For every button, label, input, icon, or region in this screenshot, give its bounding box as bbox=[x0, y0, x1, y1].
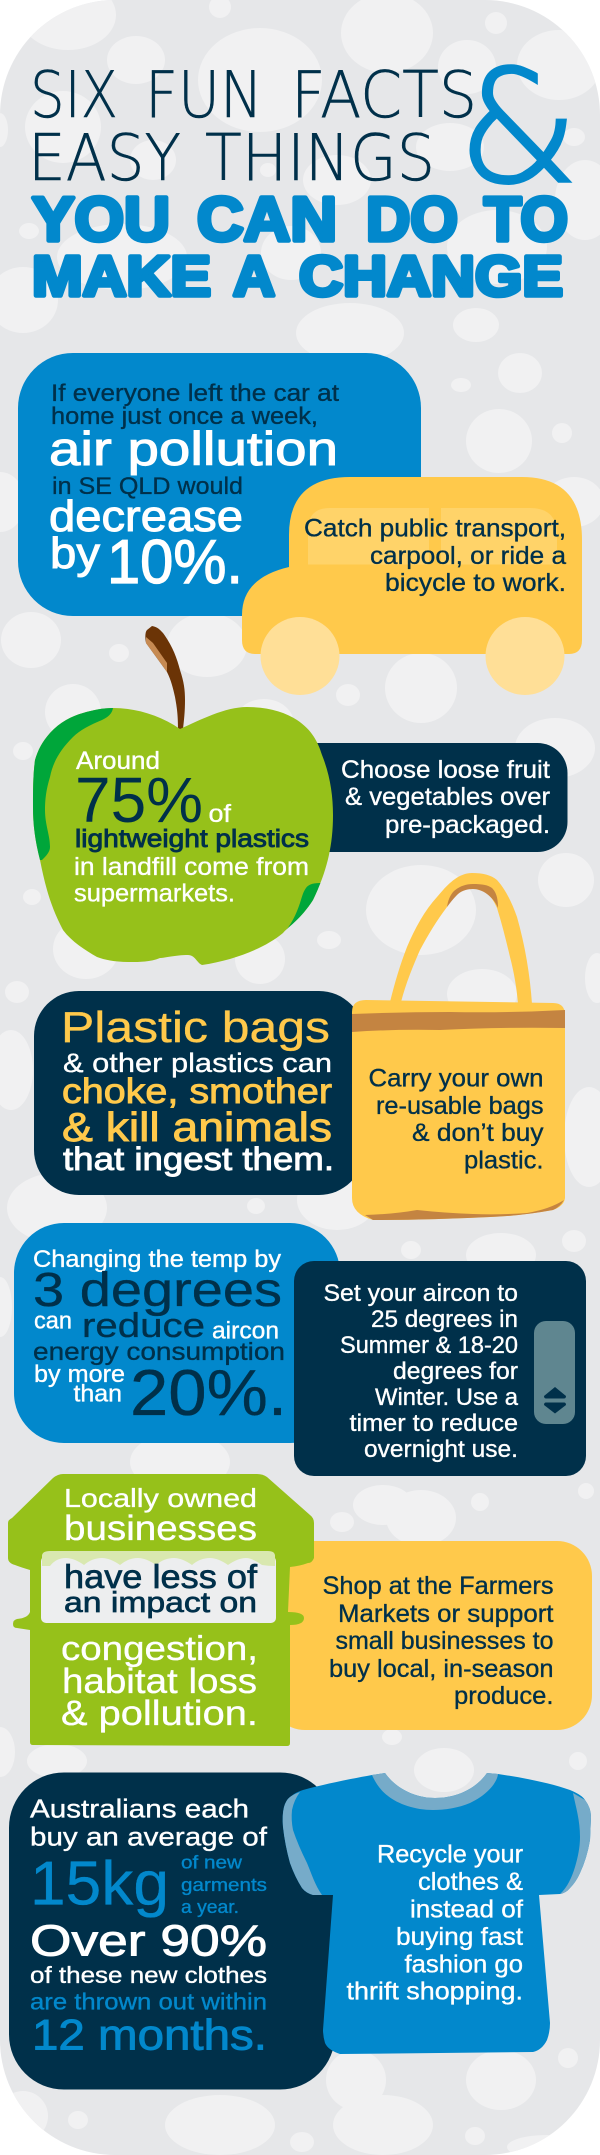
panel: farmers market tip: buy local, in-season bbox=[329, 1655, 554, 1683]
panel: aircon fact: Changing the temp by bbox=[33, 1246, 281, 1273]
panel: tote bag tip bbox=[352, 873, 565, 1220]
panel: aircon fact: can bbox=[34, 1308, 72, 1334]
panel: aircon fact: energy consumption bbox=[33, 1338, 285, 1366]
panel: local shop fact: congestion, bbox=[61, 1630, 258, 1668]
panel: local shop fact: Locally owned bbox=[64, 1483, 257, 1513]
title: CHANGE bbox=[299, 245, 563, 309]
title: FACTS bbox=[291, 59, 477, 133]
panel: aircon fact: reduce bbox=[82, 1307, 205, 1345]
panel: tote bag tip: re-usable bags bbox=[376, 1092, 544, 1120]
panel: t-shirt tip: instead of bbox=[410, 1896, 523, 1924]
panel: clothing fact: 15kg bbox=[30, 1850, 169, 1918]
panel: farmers market tip bbox=[270, 1541, 592, 1730]
panel: aircon fact: 20%. bbox=[130, 1356, 287, 1429]
title: FUN bbox=[145, 59, 263, 133]
panel: air pollution fact bbox=[18, 353, 421, 616]
panel: local shop fact bbox=[8, 1474, 314, 1746]
panel: t-shirt tip: Recycle your bbox=[377, 1840, 523, 1868]
panel: air pollution fact: by bbox=[50, 529, 100, 578]
panel: apple fact bbox=[20, 626, 333, 965]
panel: plastic bags fact: & kill animals bbox=[62, 1104, 332, 1150]
panel: plastic bags fact: that ingest them. bbox=[63, 1141, 334, 1177]
panel: dark tip loose fruit: & vegetables over bbox=[345, 783, 550, 811]
panel: aircon tip: 25 degrees in bbox=[371, 1306, 518, 1333]
panel: aircon tip: degrees for bbox=[393, 1358, 518, 1385]
panel: yellow bus tip bbox=[242, 477, 582, 695]
panel: t-shirt tip: clothes & bbox=[418, 1868, 523, 1896]
panel: tote bag tip: & don’t buy bbox=[412, 1119, 544, 1147]
panel: clothing fact: of new bbox=[181, 1852, 243, 1872]
title: EASY bbox=[28, 122, 181, 196]
panel: clothing fact: Australians each bbox=[30, 1794, 249, 1824]
panel: aircon fact: 3 degrees bbox=[33, 1264, 282, 1317]
panel: tote bag tip: plastic. bbox=[464, 1146, 544, 1174]
title: MAKE bbox=[32, 245, 211, 309]
panel: clothing fact: a year. bbox=[181, 1897, 239, 1917]
panel: air pollution fact: in SE QLD would bbox=[52, 473, 243, 500]
panel: aircon tip bbox=[294, 1261, 586, 1476]
panel: dark tip loose fruit bbox=[280, 743, 568, 852]
panel: yellow bus tip: carpool, or ride a bbox=[370, 542, 566, 570]
panel: t-shirt tip: fashion go bbox=[404, 1950, 523, 1978]
panel: farmers market tip: produce. bbox=[454, 1682, 554, 1710]
panel: local shop fact: have less of bbox=[64, 1558, 258, 1595]
panel: air pollution fact: decrease bbox=[49, 492, 243, 541]
title: CAN bbox=[197, 186, 337, 255]
panel: yellow bus tip: bicycle to work. bbox=[385, 569, 566, 597]
panel: farmers market tip: Markets or support bbox=[338, 1600, 554, 1628]
title: THINGS bbox=[205, 122, 435, 196]
panel: plastic bags fact: Plastic bags bbox=[61, 1003, 330, 1052]
panel: t-shirt tip: buying fast bbox=[396, 1923, 523, 1951]
panel: clothing fact: are thrown out within bbox=[30, 1988, 267, 2014]
panel: local shop fact: habitat loss bbox=[62, 1662, 257, 1701]
panel: clothing fact: 12 months. bbox=[32, 2012, 267, 2060]
title: & bbox=[458, 37, 578, 218]
title: DO bbox=[366, 186, 458, 255]
panel: clothing fact: of these new clothes bbox=[30, 1962, 267, 1988]
panel: tote bag tip: Carry your own bbox=[368, 1064, 544, 1092]
panel: t-shirt tip bbox=[283, 1773, 591, 2054]
panel: plastic bags fact: & other plastics can bbox=[63, 1048, 332, 1078]
panel: local shop fact: businesses bbox=[64, 1509, 257, 1548]
panel: air pollution fact: home just once a week, bbox=[51, 403, 318, 430]
icon: bus body bbox=[242, 477, 582, 654]
panel: yellow bus tip: Catch public transport, bbox=[304, 514, 566, 542]
panel: aircon tip: Winter. Use a bbox=[375, 1384, 519, 1411]
panel: apple fact: of bbox=[208, 800, 231, 828]
panel: air pollution fact: 10%. bbox=[107, 528, 243, 597]
title: SIX bbox=[30, 59, 118, 133]
panel: clothing fact: Over 90% bbox=[30, 1916, 267, 1966]
title: YOU bbox=[32, 186, 170, 255]
panel: plastic bags fact bbox=[34, 991, 364, 1195]
panel: air pollution fact: air pollution bbox=[49, 422, 338, 475]
panel: dark tip loose fruit: pre-packaged. bbox=[385, 811, 550, 839]
title: A bbox=[233, 245, 275, 309]
panel: apple fact: lightweight plastics bbox=[75, 825, 309, 853]
panel: aircon fact bbox=[14, 1223, 340, 1443]
panel: apple fact: 75% bbox=[75, 764, 203, 836]
title: TO bbox=[484, 186, 568, 255]
panel: apple fact: in landfill come from bbox=[74, 853, 309, 881]
panel: local shop fact: an impact on bbox=[64, 1587, 257, 1619]
panel: aircon tip: overnight use. bbox=[364, 1436, 518, 1463]
panel: aircon fact: by more bbox=[34, 1361, 125, 1388]
panel: air pollution fact: If everyone left the car at bbox=[51, 380, 339, 407]
panel: farmers market tip: Shop at the Farmers bbox=[322, 1572, 554, 1600]
panel: aircon fact: aircon bbox=[212, 1318, 279, 1344]
panel: local shop fact: & pollution. bbox=[61, 1694, 258, 1733]
panel: plastic bags fact: choke, smother bbox=[62, 1072, 332, 1111]
panel: clothing fact: buy an average of bbox=[30, 1822, 268, 1852]
panel: aircon tip: Summer & 18-20 bbox=[340, 1332, 518, 1359]
icon: remote control bbox=[534, 1321, 575, 1424]
panel: clothing fact bbox=[9, 1772, 335, 2090]
panel: aircon fact: than bbox=[74, 1380, 122, 1408]
panel: farmers market tip: small businesses to bbox=[336, 1627, 554, 1655]
panel: clothing fact: garments bbox=[181, 1875, 267, 1895]
panel: apple fact: Around bbox=[76, 747, 160, 775]
panel: aircon tip: timer to reduce bbox=[350, 1410, 518, 1437]
panel: aircon tip: Set your aircon to bbox=[324, 1280, 518, 1307]
panel: apple fact: supermarkets. bbox=[74, 880, 235, 908]
panel: t-shirt tip: thrift shopping. bbox=[346, 1978, 523, 2006]
title bbox=[28, 37, 578, 309]
panel: dark tip loose fruit: Choose loose fruit bbox=[341, 756, 550, 784]
